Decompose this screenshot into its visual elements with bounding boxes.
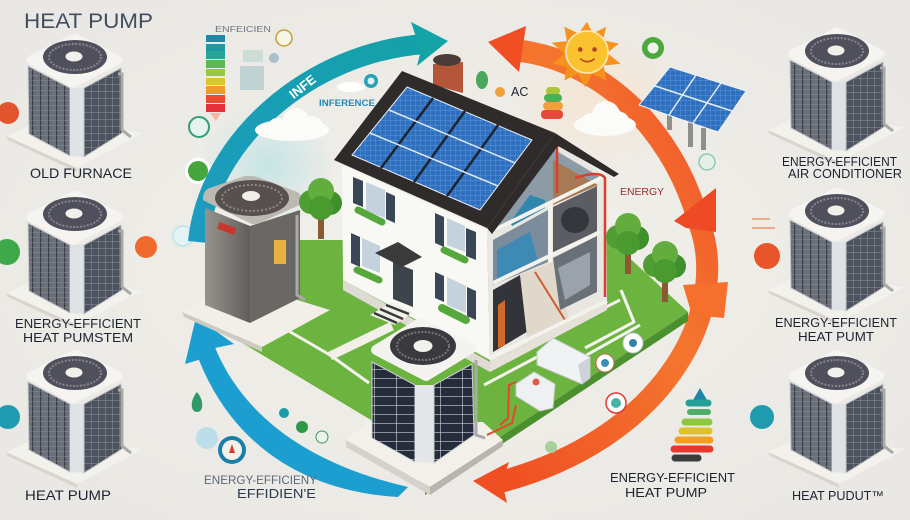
unit: large gray heat pump (182, 178, 330, 352)
labels: centre: AC (511, 85, 528, 99)
arrow: orange arc (473, 26, 728, 503)
labels: centre: ENERGY (620, 186, 664, 198)
panel: left column units (6, 38, 143, 503)
lawn (234, 240, 688, 495)
label: energy-efficient heat pump centre (610, 470, 735, 500)
icon: lawn badges (545, 333, 643, 453)
chimney (433, 62, 463, 93)
icon: blue arc badges (192, 392, 328, 464)
label: energy-efficient heat pump: ENERGY-EFFICIENT (15, 316, 141, 331)
label: heat pumt: HEAT PUMT (798, 330, 874, 344)
icon: left side badges (0, 30, 292, 429)
unit: heat pump (6, 354, 143, 488)
solar panels on roof (352, 87, 532, 210)
teal wash behind arc (198, 103, 338, 227)
unit: energy-efficient heat pump (6, 195, 143, 329)
unit: heat pudut (768, 354, 905, 488)
label: energy-efficient: ENERGY-EFFICIENT (782, 155, 897, 169)
chart: efficiency scale bar: ENFEICIEN (215, 24, 271, 34)
illustration: refrigerant pipes (487, 382, 516, 435)
unit: air conditioner (768, 32, 905, 166)
illustration: sun (552, 22, 621, 87)
illustration: thermostat box (516, 372, 555, 411)
arc label: INFE (286, 71, 319, 102)
label: energy-efficient heat pump right: ENERGY-EFFICIENT (775, 316, 897, 330)
label: energy-efficient heat pump centre: ENERGY-EFFICIENT (610, 470, 735, 485)
door and porch (393, 262, 413, 307)
illustration: solar array (639, 67, 746, 150)
illustration: small cloud with badge (337, 74, 378, 92)
labels: centre: INFERENCE (319, 98, 375, 108)
label: old furnace: OLD FURNACE (30, 165, 132, 181)
icon: stacked colour cups and flame (476, 71, 563, 119)
label: energy-efficient heat pump centre: HEAT PUMP (625, 485, 707, 500)
arrow: blue lower arc (185, 317, 408, 497)
icon: faded equipment sketch (240, 50, 279, 90)
arrow: teal upper arc (198, 22, 448, 242)
illustration: trees (299, 178, 686, 302)
rooms (495, 147, 600, 232)
chart: energy pyramid (674, 388, 710, 458)
roof (334, 71, 555, 228)
chart: efficiency scale bar (206, 24, 271, 121)
title: HEAT PUMP (24, 10, 153, 33)
icon: right side badges (642, 37, 780, 429)
house front wall (342, 165, 490, 360)
label: heat pump: HEAT PUMP (25, 487, 111, 503)
labels: centre (319, 85, 664, 198)
unit: heat pump right (768, 192, 905, 326)
illustration: house (334, 54, 619, 372)
label: energy-efficient efficiency: ENERGY-EFFICIENY (204, 473, 317, 487)
peach wash behind sun (510, 30, 690, 170)
label: energy-efficient efficiency: EFFIDIEN'E (237, 486, 316, 501)
unit: large front heat pump (346, 323, 503, 495)
label: air conditioner: AIR CONDITIONER (788, 167, 902, 181)
windows (353, 177, 363, 207)
label: heat pumstem: HEAT PUMSTEM (23, 330, 133, 345)
label: energy-efficient efficiency (204, 473, 317, 501)
house cutaway interior (487, 140, 607, 362)
illustration: cloud right (574, 101, 636, 136)
illustration: cloud left (255, 108, 329, 141)
label: heat pudut: HEAT PUDUT™ (792, 489, 884, 503)
unit: old furnace (6, 38, 143, 172)
panel: right column units (768, 32, 905, 503)
illustration: indoor wall unit (537, 338, 590, 384)
